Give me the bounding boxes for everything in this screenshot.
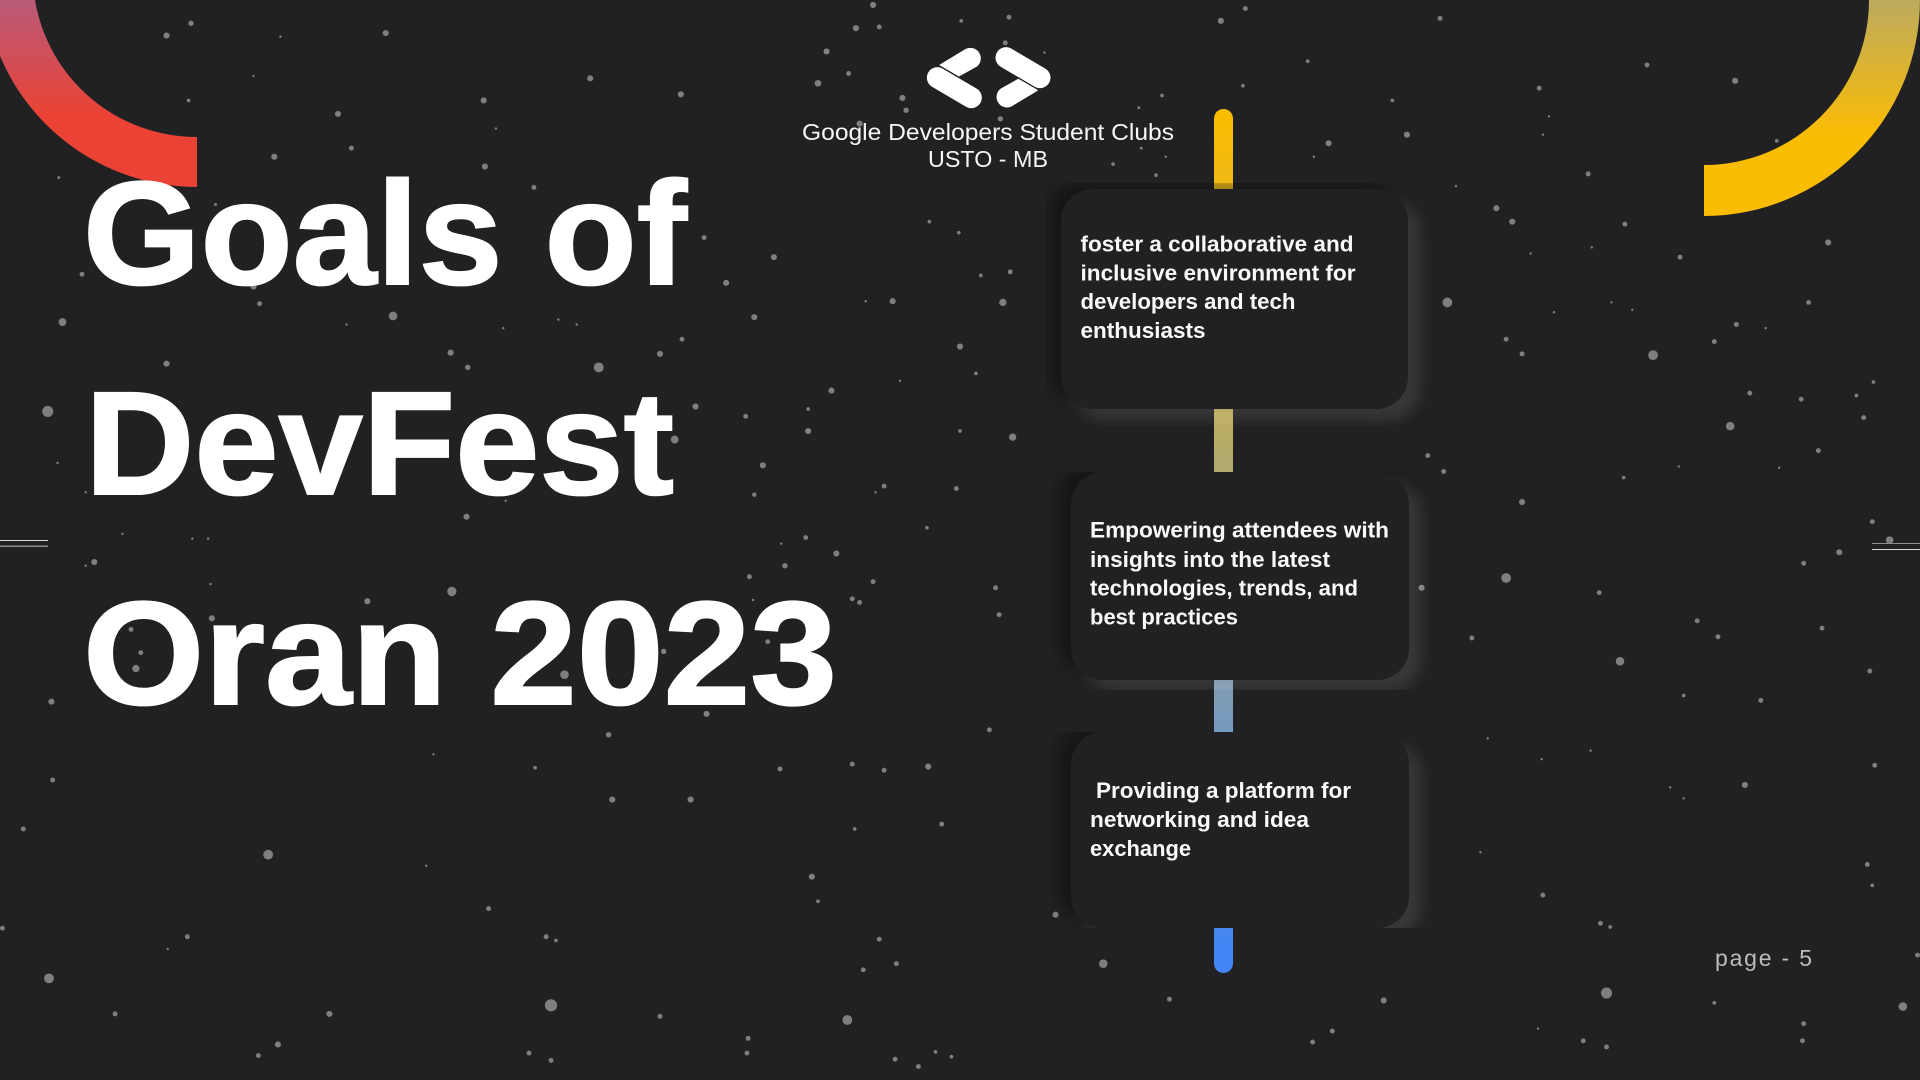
- text: goal 3: Providing a platform for: [1096, 778, 1351, 803]
- logo text: club name: Google Developers Student Clubs: [802, 119, 1174, 145]
- text: goal 1: inclusive environment for: [1080, 260, 1356, 285]
- text: goal 2: Empowering attendees with: [1090, 518, 1389, 543]
- panel: goal card 2: [1062, 472, 1423, 690]
- decorative side lines right: [1872, 536, 1920, 550]
- logo text: club name: USTO - MB: [928, 146, 1048, 172]
- text: goal 2: insights into the latest: [1090, 547, 1331, 572]
- text: goal 2: [1090, 518, 1389, 630]
- title: Goals of DevFest Oran 2023: Oran 2023: [83, 572, 837, 736]
- title: Goals of DevFest Oran 2023: DevFest: [85, 362, 674, 526]
- logo: developer chevrons: [937, 48, 1040, 107]
- text: goal 1: developers and tech: [1080, 289, 1296, 314]
- text: goal 2: best practices: [1090, 604, 1238, 630]
- text: goal 1: [1080, 231, 1356, 343]
- panel: goal card 1: [1052, 183, 1422, 422]
- panel: goal card 3: [1062, 732, 1423, 928]
- vertical gradient timeline bar: [1214, 109, 1233, 973]
- arc: top-left red corner: [0, 0, 197, 187]
- text: goal 3: [1090, 778, 1351, 861]
- logo text: club name: [802, 119, 1174, 172]
- text: goal 1: foster a collaborative and: [1080, 231, 1354, 256]
- decorative side lines left: [0, 540, 48, 547]
- text: goal 2: technologies, trends, and: [1090, 576, 1358, 600]
- arc: top-right yellow corner: [1704, 0, 1920, 216]
- title: Goals of DevFest Oran 2023: Goals of: [83, 152, 688, 316]
- text: goal 3: networking and idea: [1090, 807, 1310, 832]
- title: Goals of DevFest Oran 2023: [83, 152, 837, 736]
- text: goal 1: enthusiasts: [1080, 318, 1206, 343]
- page number: page - 5: [1715, 945, 1812, 971]
- text: goal 3: exchange: [1090, 836, 1191, 861]
